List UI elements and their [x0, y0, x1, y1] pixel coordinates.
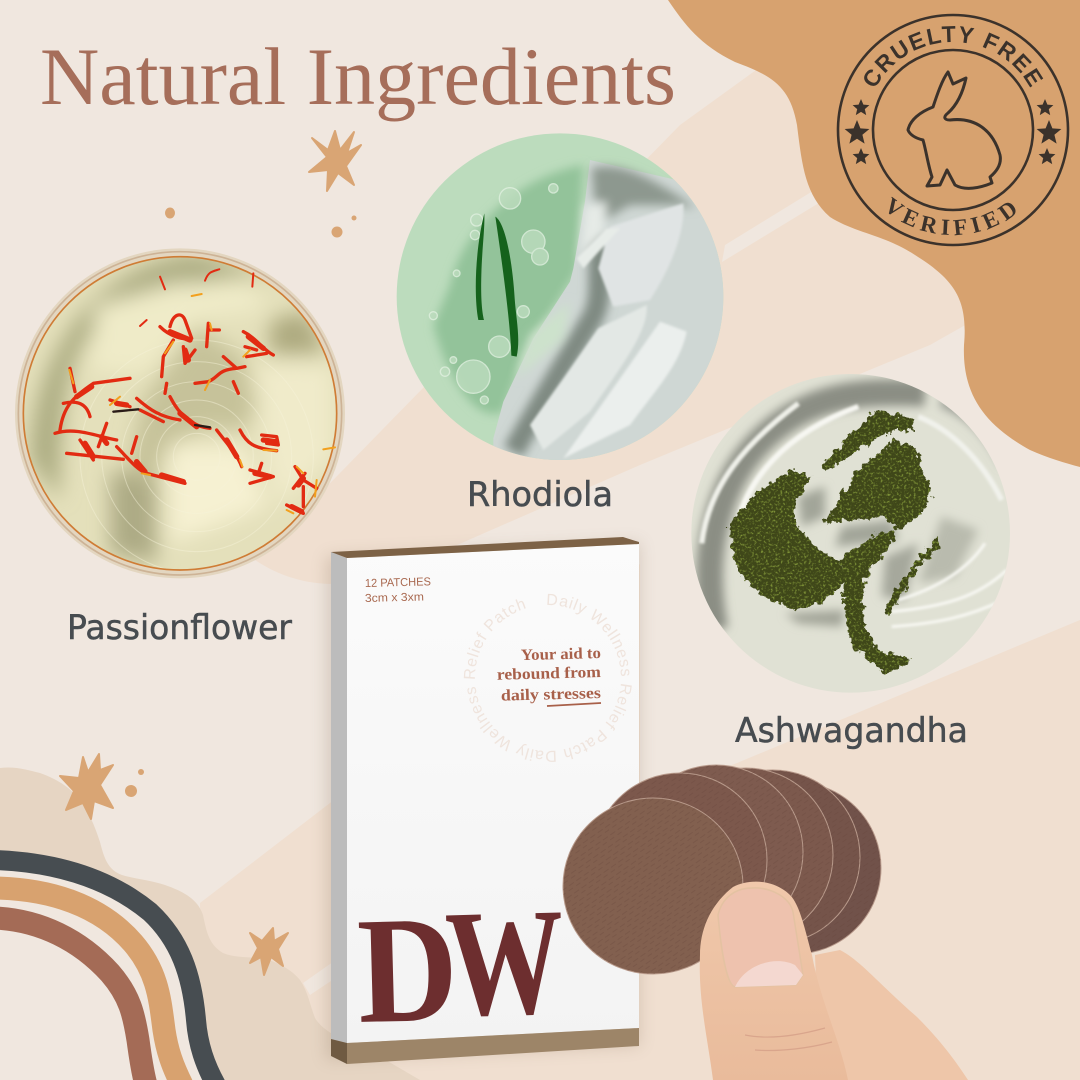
swirl texture	[80, 340, 313, 573]
box circular text: Daily Wellness Relief Patch Daily Wellness Relief Patch	[464, 594, 632, 762]
box size text: 12 PATCHES	[365, 576, 431, 590]
bubbles	[429, 184, 558, 404]
label: ashwagandha: Ashwagandha	[735, 711, 968, 751]
box tagline: Your aid to	[521, 645, 601, 664]
green inner area	[433, 165, 583, 414]
index finger	[815, 950, 968, 1080]
label: passionflower: Passionflower	[67, 608, 292, 648]
box size text: 3cm x 3xm	[365, 591, 424, 605]
box tagline: rebound from	[497, 664, 602, 684]
saffron threads	[55, 269, 335, 513]
cruelty free badge	[836, 14, 1070, 246]
DW logo	[355, 877, 566, 1055]
badge text: cruelty free: CRUELTY FREE	[864, 26, 1044, 88]
box tagline	[497, 645, 602, 705]
box side bottom	[331, 1039, 347, 1064]
title: Natural Ingredients	[40, 31, 676, 122]
box tagline: daily stresses	[501, 685, 601, 705]
thumb	[700, 882, 848, 1080]
ingredient: ashwagandha dish	[691, 374, 1010, 693]
ingredient: passionflower dish	[15, 248, 345, 578]
nail tip	[735, 961, 803, 987]
box size text	[365, 576, 431, 605]
bottom-left beige hill	[0, 767, 420, 1080]
patch stack	[563, 765, 881, 974]
orange corner blob	[668, 0, 1080, 467]
herb powder shapes	[728, 410, 942, 673]
box bottom flap	[347, 1028, 639, 1064]
green leaf slivers	[476, 213, 518, 357]
clear gel	[493, 160, 727, 462]
DW logo: D	[355, 884, 460, 1055]
thumbnail	[718, 888, 803, 987]
hand holding patches	[700, 882, 968, 1080]
box top flap	[331, 537, 639, 558]
rabbit icon	[908, 72, 1000, 188]
label: rhodiola: Rhodiola	[467, 475, 613, 515]
product box	[322, 537, 645, 1064]
knuckle wrinkles	[745, 1028, 832, 1051]
box face	[347, 544, 639, 1043]
badge stars	[845, 99, 1061, 164]
rainbow decoration	[0, 860, 216, 1080]
box side	[331, 552, 347, 1043]
ingredient: rhodiola gel	[397, 133, 727, 462]
badge text: verified: VERIFIED	[888, 196, 1016, 236]
DW logo: W	[443, 877, 566, 1048]
decorative stars and dots	[60, 131, 361, 975]
